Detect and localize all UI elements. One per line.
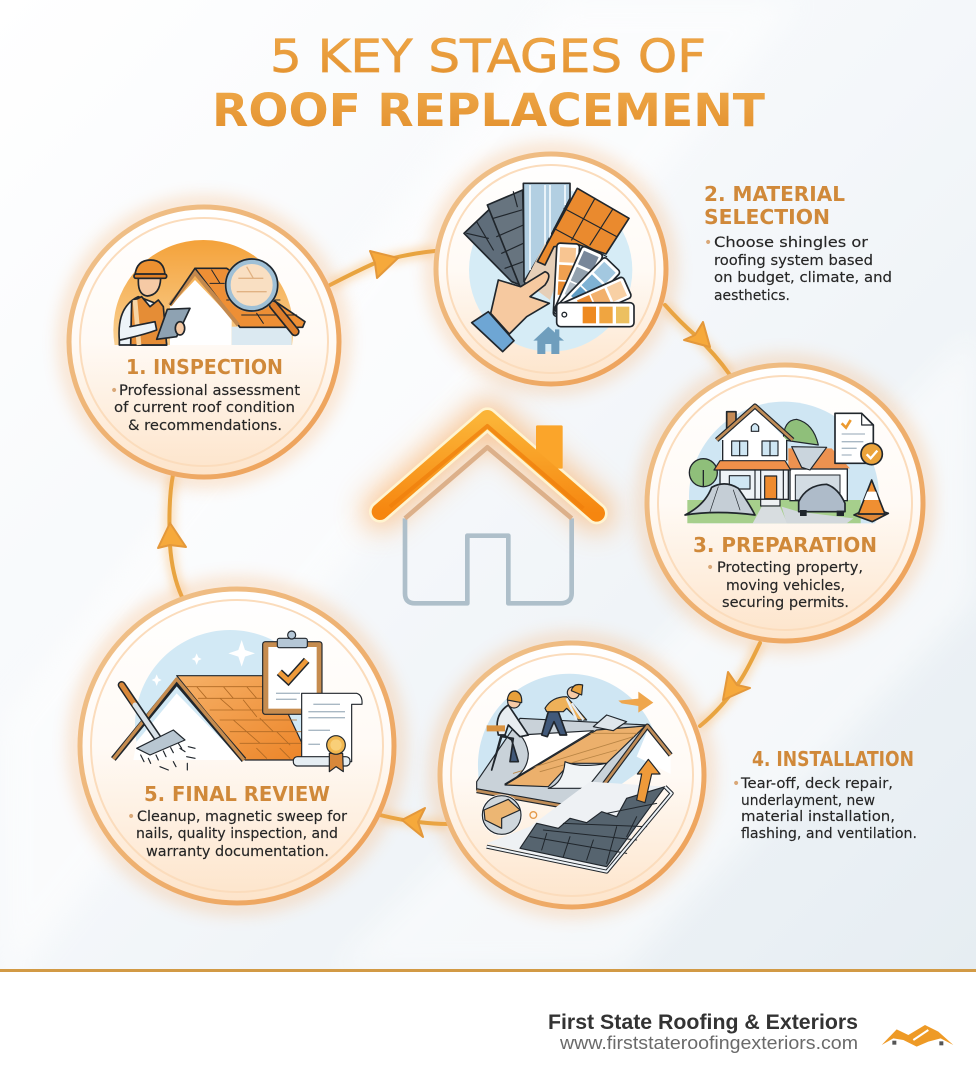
icon: finished roof and documents <box>111 630 363 772</box>
text block: • <box>706 560 714 576</box>
worker right <box>542 712 567 737</box>
text block: moving vehicles, <box>726 578 845 594</box>
text block <box>127 809 347 860</box>
company name: First State Roofing & Exteriors <box>548 1011 858 1034</box>
text block: step 4: material installation, <box>741 809 895 825</box>
website: www.firststateroofingexteriors.com <box>559 1033 858 1053</box>
title: 5 KEY STAGES OF <box>270 30 706 83</box>
title: ROOF REPLACEMENT <box>212 84 765 137</box>
text block: step 4: • <box>732 776 740 792</box>
heading: SELECTION <box>704 205 830 229</box>
text block: • <box>110 383 118 399</box>
icon: inspector and roof <box>113 240 306 346</box>
text block: Protecting property, <box>717 560 863 576</box>
text block: step 4 <box>732 747 917 842</box>
central house icon <box>357 418 617 603</box>
footer <box>0 969 976 1088</box>
heading: 5. FINAL REVIEW <box>144 782 330 806</box>
text block: step 2 <box>704 182 892 304</box>
text block: step 2: roofing system based <box>714 253 873 269</box>
text block: step 4: Tear-off, deck repair, <box>740 776 893 792</box>
icon: roofers installing <box>477 674 672 872</box>
panel: step 5 final review <box>77 586 397 906</box>
text block: • <box>127 809 135 825</box>
panel: step 4 installation <box>438 641 706 909</box>
icon: house being prepared <box>684 402 890 524</box>
heading: 1. INSPECTION <box>126 355 283 379</box>
text block <box>706 560 863 611</box>
text block: step 2: on budget, climate, and <box>714 270 892 286</box>
panel: step 1 inspection <box>67 205 341 479</box>
text block <box>110 383 301 434</box>
text block: step 2: • <box>704 235 712 251</box>
text block: securing permits. <box>722 595 849 611</box>
text block: of current roof condition <box>114 400 295 416</box>
detail inset <box>481 794 537 836</box>
text block: warranty documentation. <box>146 844 329 860</box>
text block: Professional assessment <box>119 383 301 399</box>
icon: material samples and swatches <box>464 183 634 354</box>
text block: & recommendations. <box>128 418 282 434</box>
panel: step 2 material selection <box>434 152 668 386</box>
heading: 2. MATERIAL <box>704 182 845 206</box>
worker left <box>492 733 518 770</box>
text block: nails, quality inspection, and <box>136 826 338 842</box>
text block: step 2: aesthetics. <box>714 288 790 304</box>
heading: 4. INSTALLATION <box>752 747 914 771</box>
text block: step 2: Choose shingles or <box>714 235 868 251</box>
cycle arrows <box>158 251 760 837</box>
heading <box>704 182 845 229</box>
heading: 3. PREPARATION <box>693 533 877 557</box>
title <box>212 30 765 137</box>
text block: Cleanup, magnetic sweep for <box>137 809 347 825</box>
text block: step 4: underlayment, new <box>741 793 875 809</box>
text block: step 4: flashing, and ventilation. <box>741 826 917 842</box>
icon: company logo <box>882 1025 953 1047</box>
panel: step 3 preparation <box>645 363 925 643</box>
